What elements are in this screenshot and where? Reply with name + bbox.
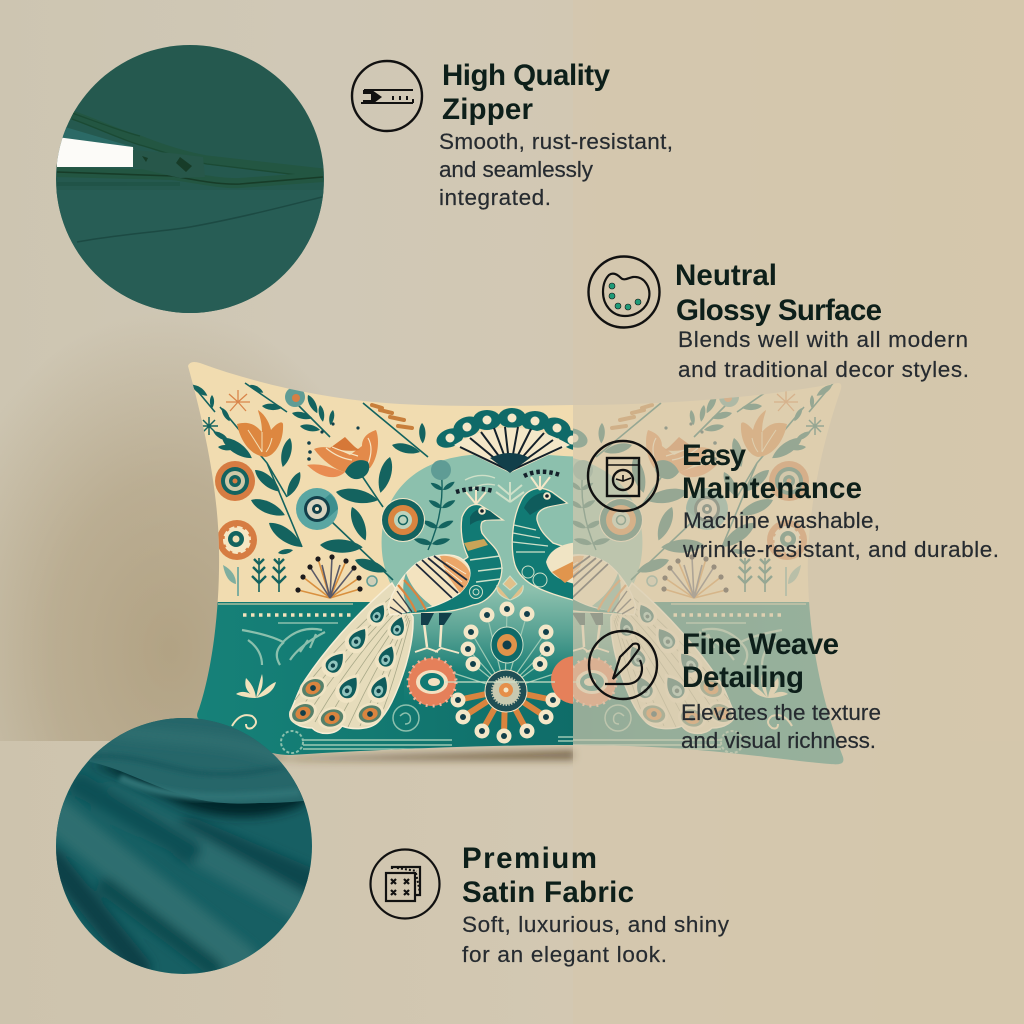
pillow right mirrored half [573,383,844,764]
heading [462,842,634,909]
wall shading left of pillow [0,352,264,741]
heading: Satin Fabric [462,876,634,909]
icon: palette [588,256,660,328]
description: Elevates the texture [681,700,881,725]
satin fabric close-up circle [56,718,312,974]
heading [682,628,839,694]
description: for an elegant look. [462,942,667,967]
heading: Detailing [682,661,804,694]
description: Smooth, rust-resistant, [439,129,673,154]
heading: Maintenance [682,472,862,505]
feature: high quality zipper [352,59,673,210]
icon: cushions [370,850,440,918]
description: and seamlessly [439,157,594,182]
icon: zipper [352,61,422,131]
heading: Easy [682,439,747,472]
description: wrinkle-resistant, and durable. [682,537,999,562]
heading: Glossy Surface [676,294,882,327]
description: integrated. [439,185,551,210]
heading [682,439,862,505]
feature: fine weave detailing [589,628,881,753]
description [681,700,881,753]
heading: Neutral [675,259,777,292]
pillow left printed half [188,362,573,755]
description: Blends well with all modern [678,327,968,352]
heading: High Quality [442,59,611,92]
heading: Premium [462,842,597,875]
description: Soft, luxurious, and shiny [462,912,730,937]
heading [442,59,611,126]
description [439,129,673,210]
icon: pen nib [589,631,657,699]
description: and visual richness. [681,728,876,753]
pillow [188,362,844,764]
floor surface [0,741,1024,1024]
description: and traditional decor styles. [678,357,969,382]
zipper close-up circle [56,45,324,313]
pillow shadow [240,748,575,760]
heading: Zipper [442,93,534,126]
feature: premium satin fabric [370,842,730,967]
description: Machine washable, [683,508,880,533]
feature: easy maintenance [588,439,999,562]
feature: neutral glossy surface [588,256,969,382]
heading [675,259,882,327]
description [462,912,730,967]
description [682,508,999,562]
heading: Fine Weave [682,628,839,661]
description [678,327,969,382]
translucent overlay on right side [573,0,1024,1024]
icon: washing machine [588,441,658,511]
